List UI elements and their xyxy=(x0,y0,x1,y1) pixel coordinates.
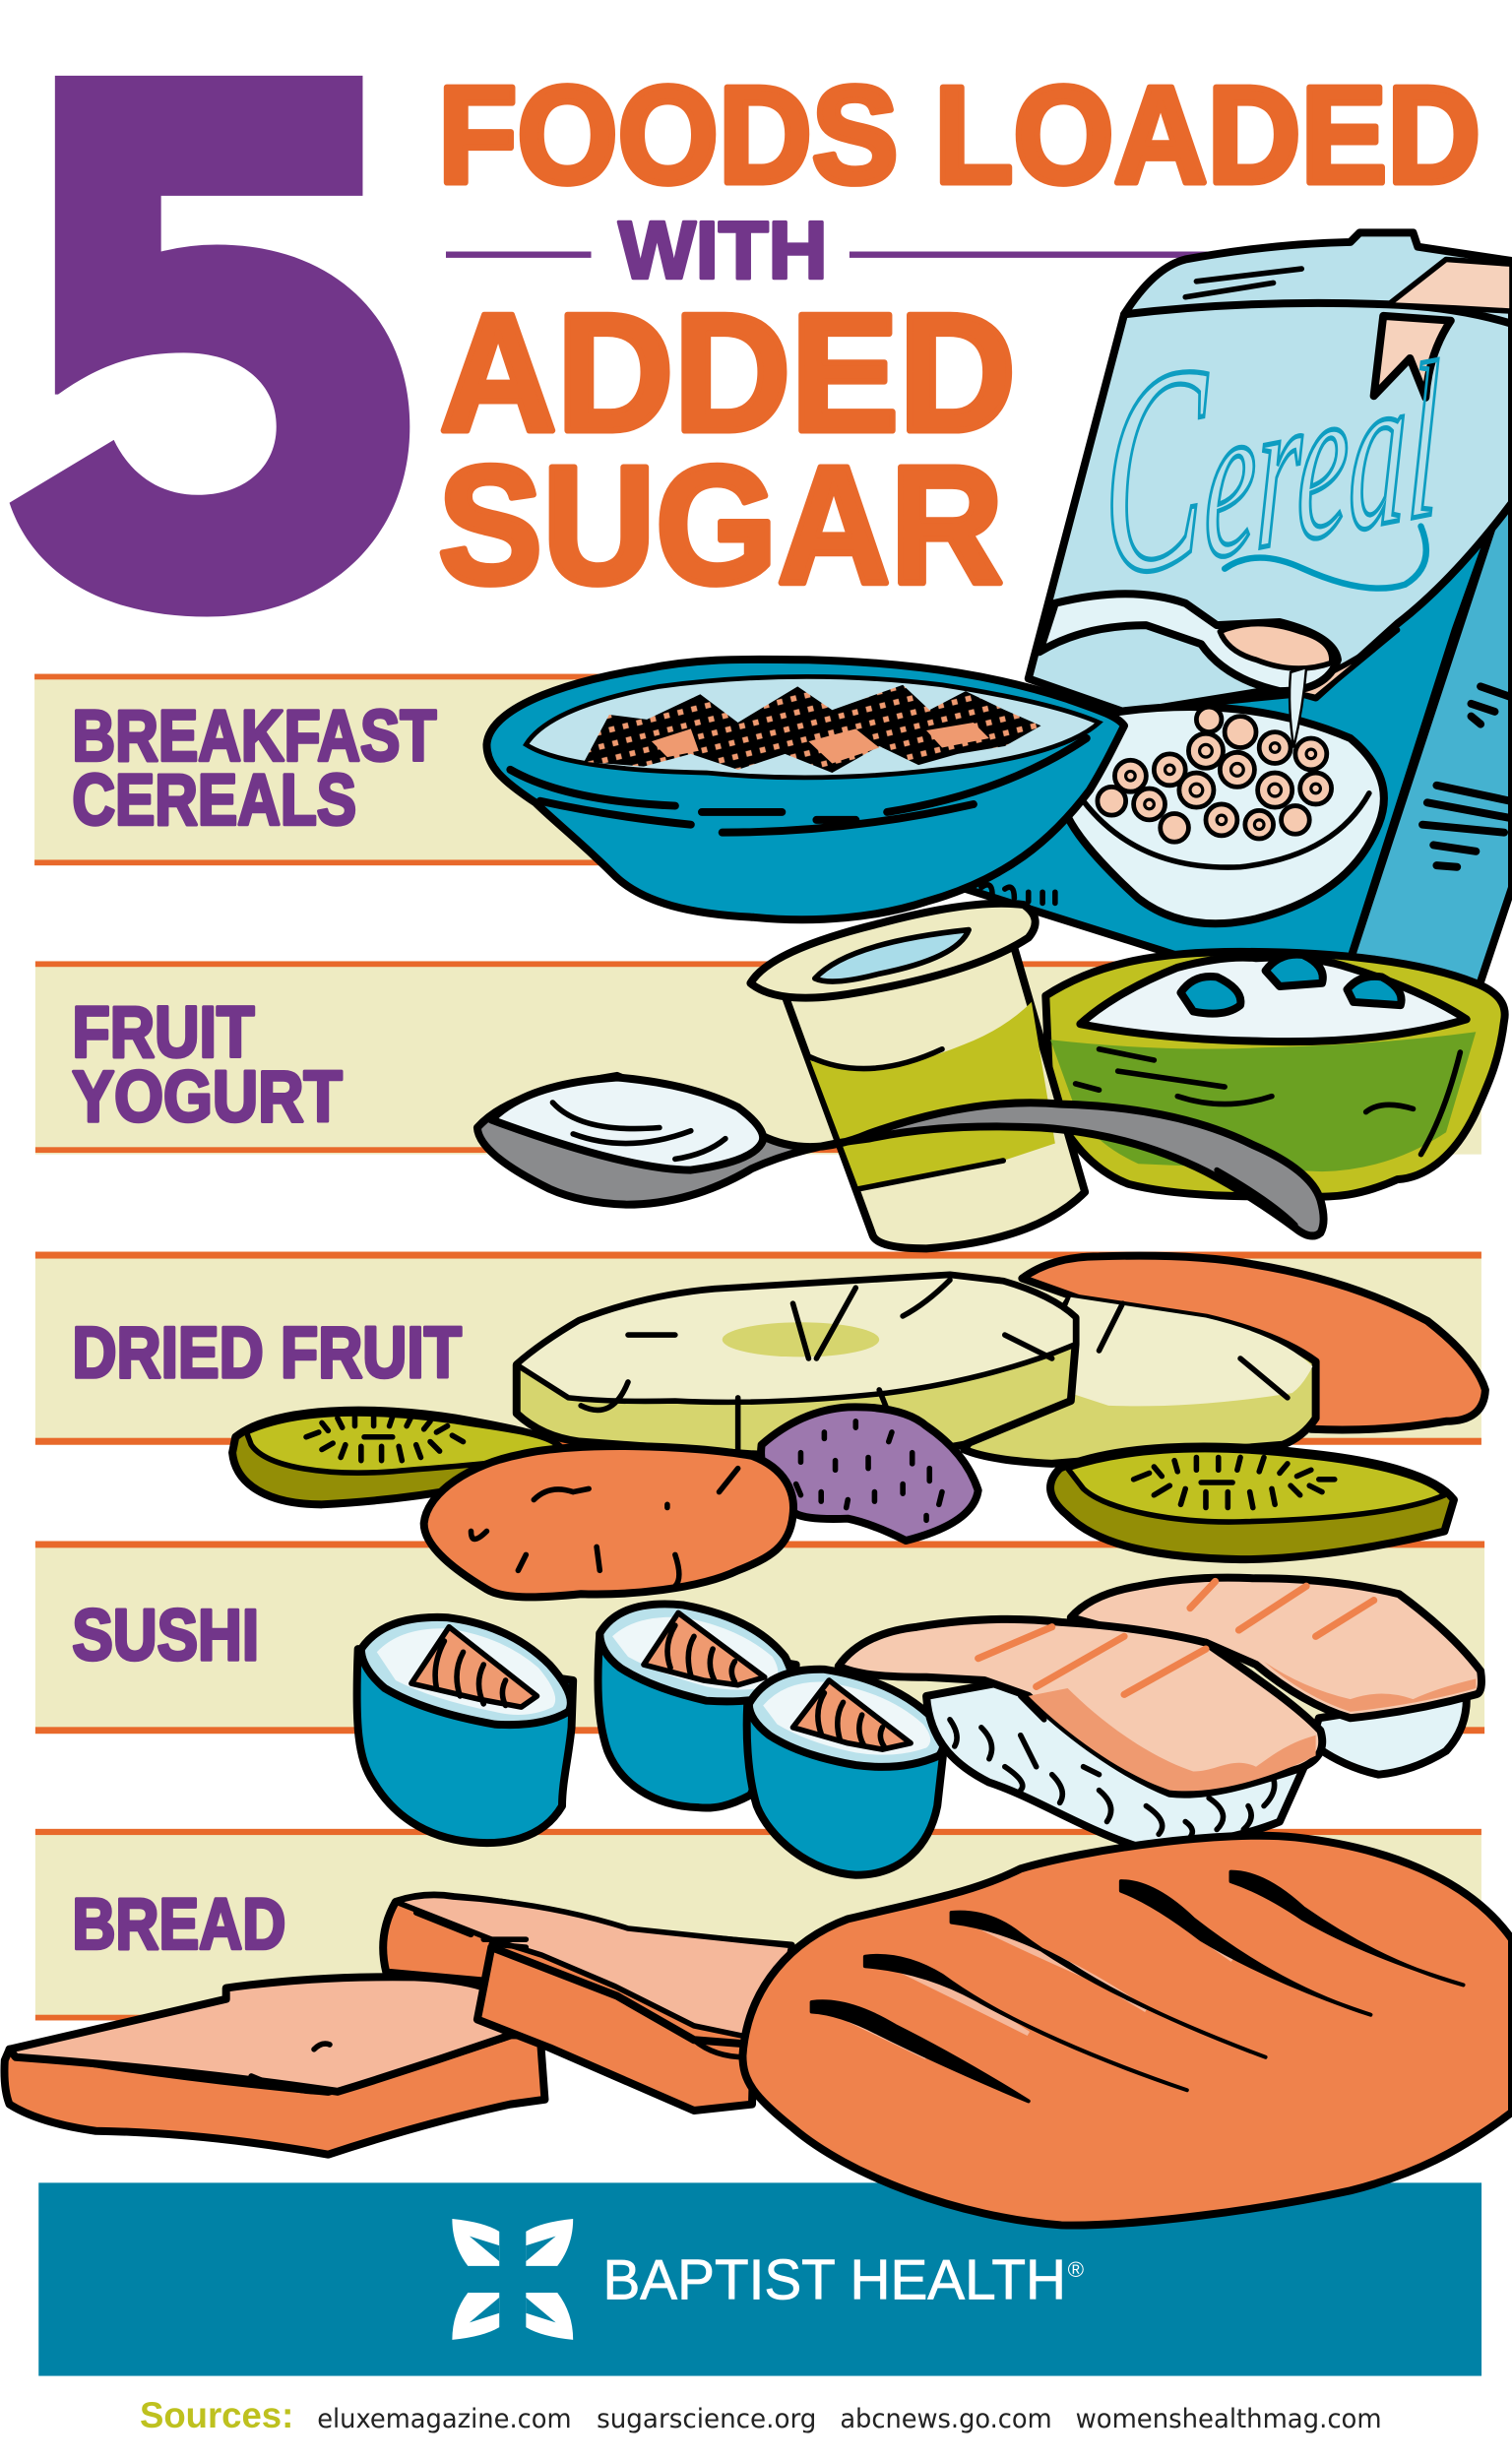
label: fruit yogurt xyxy=(72,992,343,1137)
roll 3 body xyxy=(747,1704,945,1875)
box teal face xyxy=(961,472,1512,960)
roll 1 salmon xyxy=(411,1627,536,1707)
layer bottom line xyxy=(858,1161,1003,1189)
orange fruit ink marks xyxy=(472,1469,738,1586)
purple fruit xyxy=(761,1407,978,1541)
front orange fruit xyxy=(424,1446,793,1597)
roll 2 top xyxy=(599,1604,792,1701)
leaf top right xyxy=(526,2219,573,2266)
label: sushi: SUSHI xyxy=(72,1595,259,1675)
banner xyxy=(38,2182,1481,2376)
script underline swash xyxy=(1225,527,1426,589)
blueberry 1 xyxy=(1180,977,1240,1014)
source 4: womenshealthmag.com xyxy=(1076,2405,1382,2434)
label: breakfast cereals: BREAKFAST xyxy=(72,695,437,776)
peach reflection triangle xyxy=(1288,630,1398,697)
icon: bowl of yogurt with blueberries xyxy=(1045,952,1505,1197)
big number 5 xyxy=(0,0,410,617)
roll 1 top xyxy=(361,1617,571,1725)
front nigiri rice xyxy=(926,1665,1306,1848)
bowl ink marks xyxy=(1076,1049,1460,1155)
back nigiri scores xyxy=(1190,1581,1374,1636)
tape tab xyxy=(1374,316,1451,398)
blueberry 3 xyxy=(1348,977,1402,1005)
title line: with: WITH xyxy=(618,205,828,296)
roll 3 salmon xyxy=(792,1680,911,1749)
front nigiri scores xyxy=(978,1627,1206,1694)
box side panel xyxy=(1351,467,1512,986)
source 3: abcnews.go.com xyxy=(840,2405,1052,2434)
cup contents xyxy=(815,930,969,981)
back slice top xyxy=(396,1895,791,2042)
icon: round bread loaf xyxy=(742,1836,1512,2226)
pineapple front top xyxy=(517,1275,1076,1402)
bowl inner rim line xyxy=(1084,793,1369,867)
left kiwi top xyxy=(246,1414,557,1473)
back nigiri topping xyxy=(1071,1578,1481,1718)
roll 3 salmon lines xyxy=(818,1693,884,1746)
roll 1 body xyxy=(357,1649,573,1843)
front left slice side xyxy=(4,2035,544,2155)
label: fruit yogurt: FRUIT xyxy=(72,992,255,1073)
front left slice top xyxy=(10,1977,510,2092)
roll 3 top xyxy=(749,1670,943,1767)
middle slice xyxy=(477,1947,754,2111)
leaf top left xyxy=(452,2219,499,2266)
leaf slits xyxy=(470,2237,556,2322)
title line: added: ADDED xyxy=(440,280,1016,467)
loaf scores xyxy=(812,1872,1464,2101)
logo mark xyxy=(452,2219,573,2340)
bowl interior xyxy=(526,676,1100,778)
back nigiri rice xyxy=(1311,1694,1467,1775)
label: dried fruit: DRIED FRUIT xyxy=(72,1312,462,1393)
icon: dried fruit xyxy=(232,1256,1485,1597)
pineapple back top xyxy=(1037,1297,1312,1406)
roll 1 salmon lines xyxy=(435,1641,506,1705)
band: fruit yogurt xyxy=(35,961,1481,1155)
pineapple ring back xyxy=(964,1297,1316,1464)
milk bowl body xyxy=(1064,707,1384,923)
back nigiri lip xyxy=(1264,1662,1476,1712)
rule right of with xyxy=(850,252,1208,258)
icon: blue bowl of waffle cereal xyxy=(486,660,1124,919)
cup body xyxy=(786,942,1085,1248)
leaf bottom right xyxy=(526,2293,573,2340)
back slice marks xyxy=(416,1913,526,1947)
sources xyxy=(140,2395,1382,2435)
yogurt layer xyxy=(810,1002,1055,1189)
cup rim xyxy=(750,904,1036,998)
band: dried fruit xyxy=(35,1252,1481,1445)
waffle cereal pieces xyxy=(584,685,1040,773)
title line: sugar: SUGAR xyxy=(438,432,1003,619)
cereal pile xyxy=(1098,707,1332,842)
roll 2 rice xyxy=(612,1617,778,1690)
cereal on spoon xyxy=(1220,624,1332,668)
title xyxy=(438,57,1480,619)
label: breakfast cereals: CEREALS xyxy=(72,760,356,841)
registered mark: ® xyxy=(1068,2257,1085,2282)
front nigiri lip xyxy=(1029,1688,1316,1791)
sources heading: Sources: xyxy=(140,2395,293,2435)
cereal peach flakes xyxy=(652,723,989,763)
roll 2 body xyxy=(598,1633,796,1808)
rule left of with xyxy=(446,252,592,258)
back apricot xyxy=(1022,1256,1485,1429)
green bowl outer xyxy=(1045,952,1505,1197)
band: breakfast cereals xyxy=(34,674,662,865)
label: breakfast cereals xyxy=(72,695,437,841)
roll 2 salmon xyxy=(644,1612,765,1685)
box stripes xyxy=(1422,686,1512,867)
icon: spoon with yogurt xyxy=(477,1076,1324,1235)
blueberry 2 xyxy=(1266,955,1323,986)
left kiwi xyxy=(232,1411,564,1504)
icon: nigiri sushi xyxy=(839,1578,1481,1848)
back slice xyxy=(383,1895,816,2057)
icon: bread slices xyxy=(4,1895,816,2155)
front nigiri topping xyxy=(839,1619,1322,1795)
loaf score highlights xyxy=(836,1884,1343,2057)
icon: cereal box xyxy=(961,232,1512,986)
serving spoon xyxy=(1040,594,1338,691)
milk drip xyxy=(1290,667,1306,748)
spoon xyxy=(477,1076,1324,1235)
pineapple ink marks xyxy=(581,1280,1288,1453)
box front face xyxy=(1029,232,1512,713)
icon: yogurt cup xyxy=(750,904,1085,1248)
layer top line xyxy=(810,1049,942,1069)
box lid marks xyxy=(1185,269,1301,297)
middle slice crust xyxy=(694,2040,746,2057)
purple fruit seeds xyxy=(796,1421,942,1520)
source 2: sugarscience.org xyxy=(597,2405,816,2434)
top crumb marks xyxy=(251,2044,330,2092)
pineapple ring front xyxy=(517,1275,1076,1456)
icon: bowl of round cereal xyxy=(1064,667,1384,923)
right kiwi top xyxy=(1068,1450,1444,1522)
roll 1 rice xyxy=(377,1628,555,1715)
green bowl inner xyxy=(1050,1032,1476,1171)
yogurt swirl xyxy=(552,1103,1295,1225)
tape xyxy=(1388,259,1512,311)
icon: sushi rolls xyxy=(357,1604,945,1875)
rice grain marks xyxy=(950,1696,1275,1837)
cereal centres xyxy=(1126,743,1320,829)
label: fruit yogurt: YOGURT xyxy=(72,1056,343,1137)
right kiwi xyxy=(1050,1447,1454,1559)
band: bread xyxy=(35,1829,1481,2020)
band: sushi xyxy=(35,1541,1484,1734)
bowl rim line xyxy=(510,738,1087,833)
yogurt mound xyxy=(1080,958,1467,1041)
bowl body xyxy=(486,660,1124,919)
right kiwi seeds xyxy=(1134,1457,1335,1508)
source 1: eluxemagazine.com xyxy=(317,2405,572,2434)
box print marks xyxy=(981,885,1055,903)
loaf xyxy=(742,1836,1512,2226)
yogurt on spoon xyxy=(491,1077,763,1170)
logo wordmark: BAPTIST HEALTH xyxy=(602,2248,1066,2311)
label: bread: BREAD xyxy=(72,1884,285,1965)
box top fold line xyxy=(1124,303,1512,324)
leaf bottom left xyxy=(452,2293,499,2340)
left kiwi seeds xyxy=(306,1417,464,1461)
pineapple hole xyxy=(723,1322,879,1357)
roll 3 rice xyxy=(763,1681,930,1755)
roll 2 salmon lines xyxy=(667,1625,734,1682)
